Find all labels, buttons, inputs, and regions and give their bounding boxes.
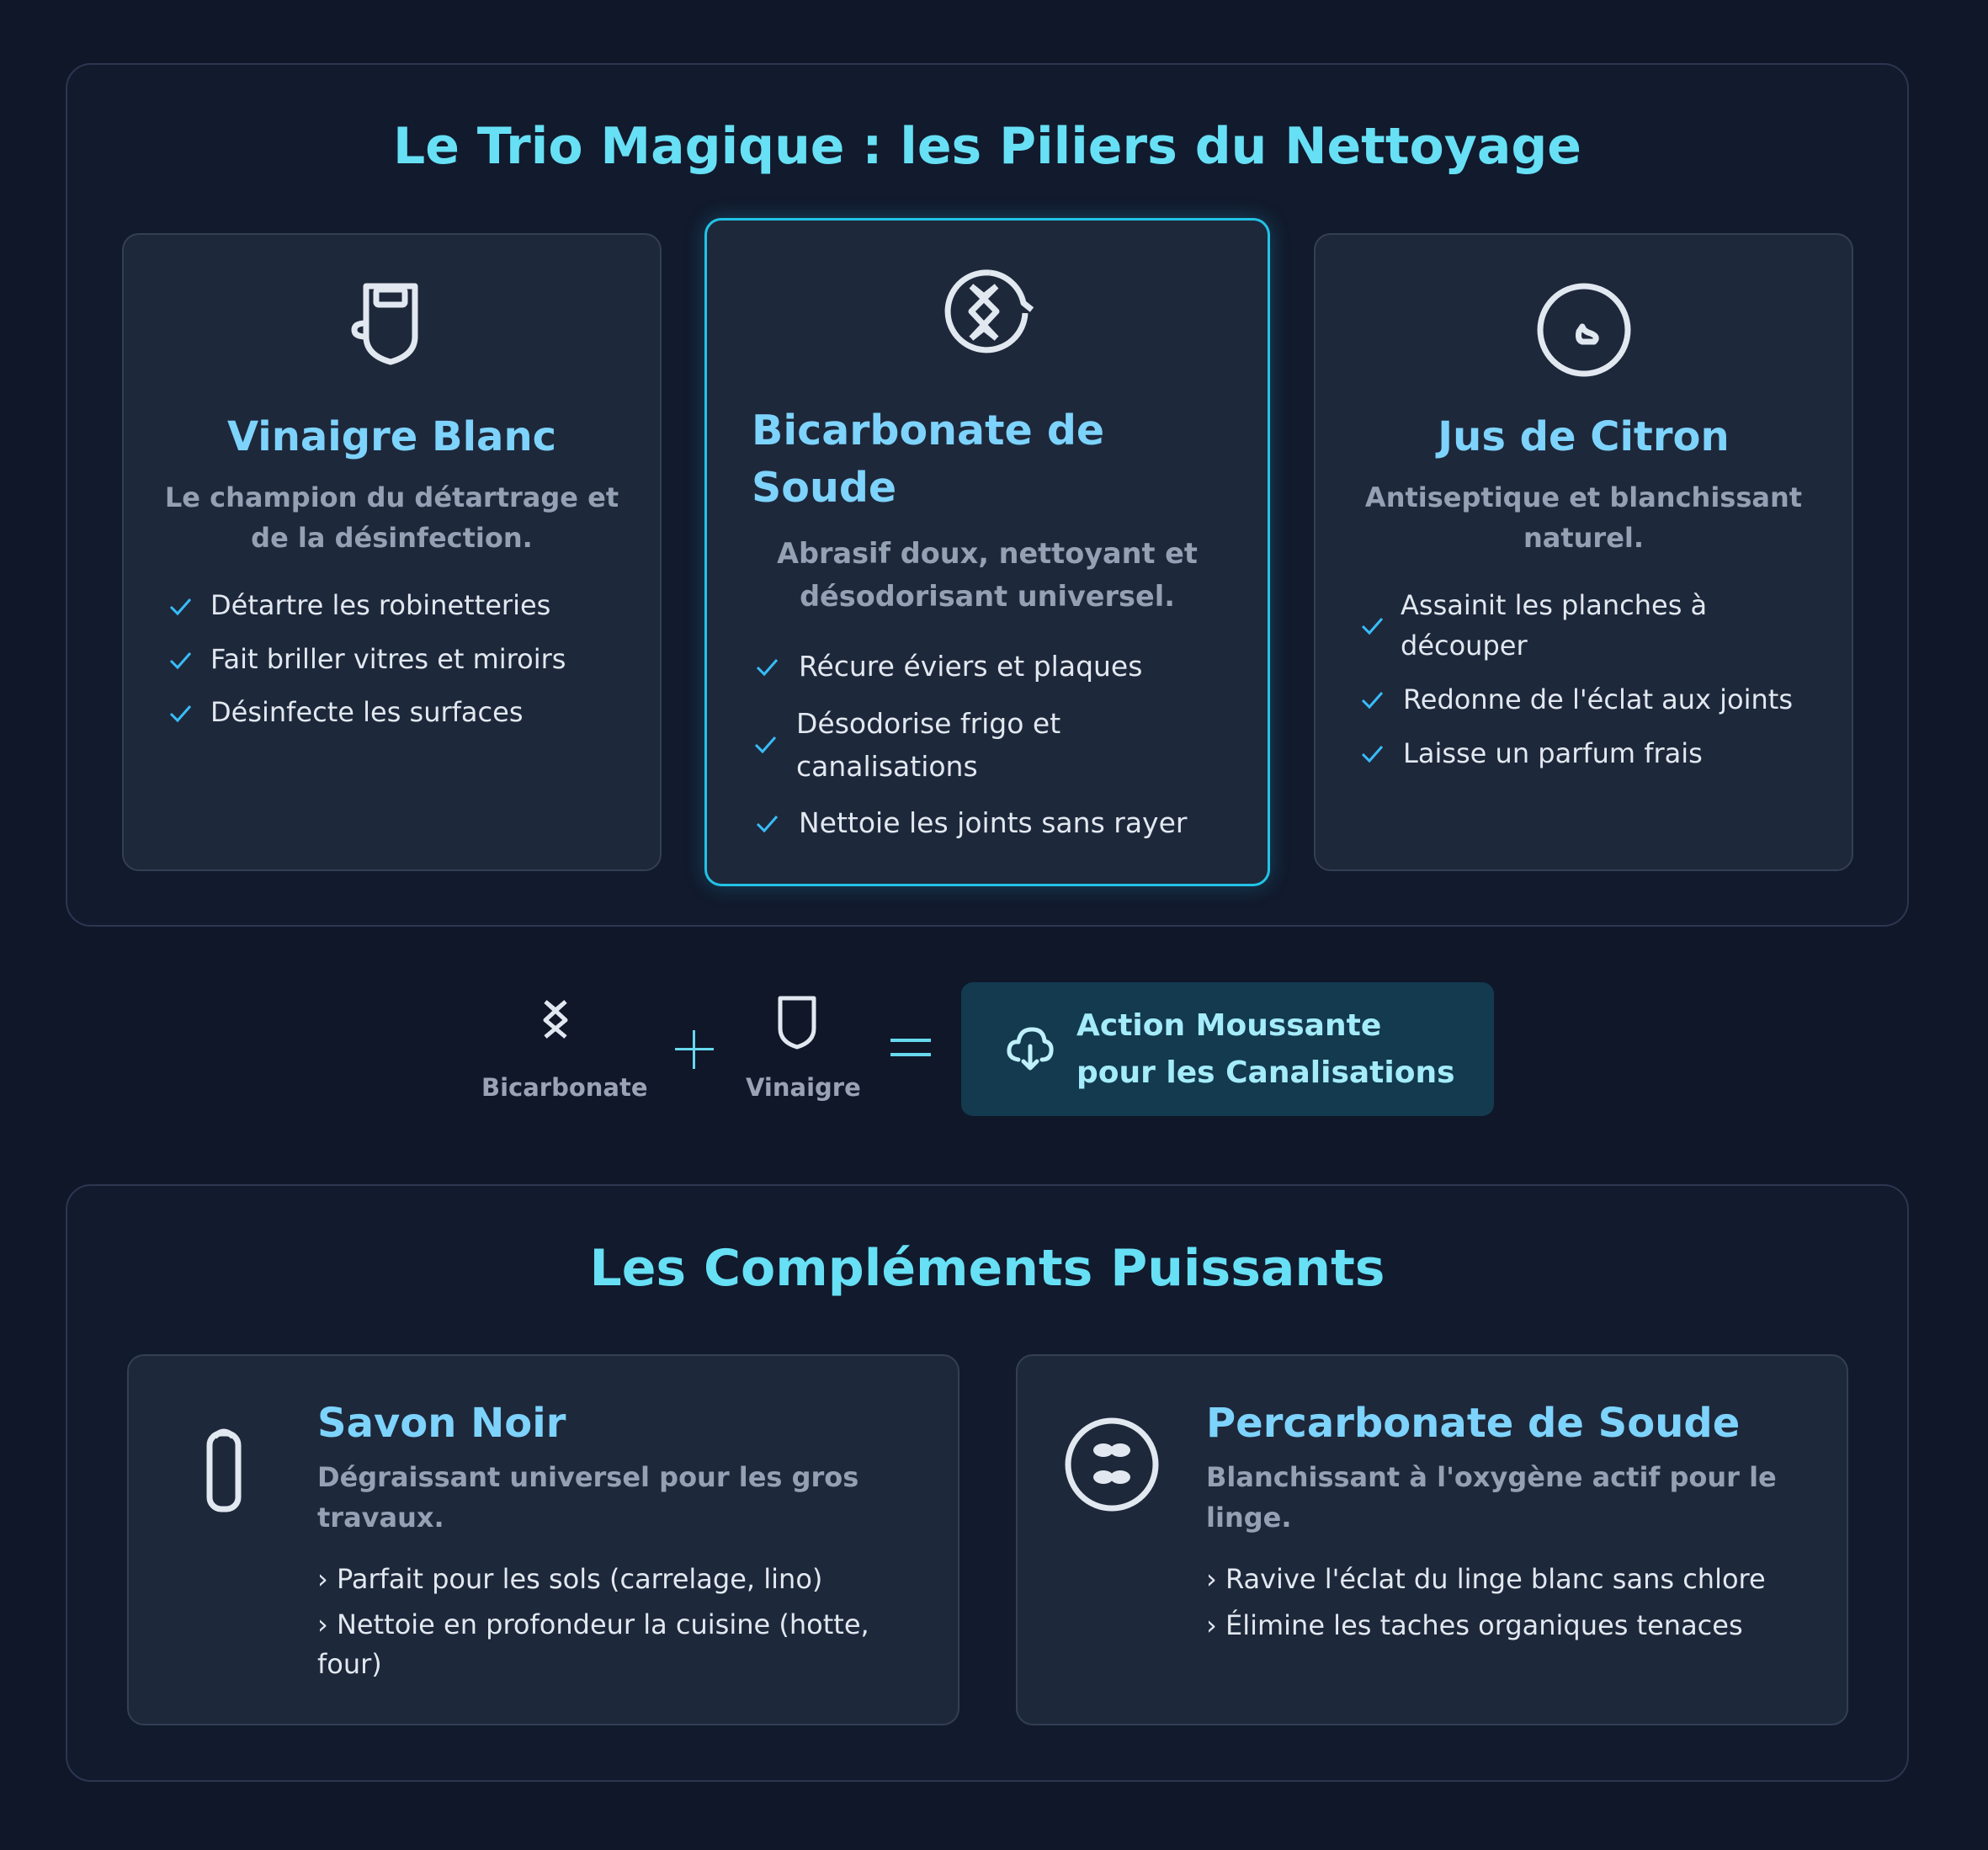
formula row [481, 982, 1494, 1116]
heading: Soude [752, 464, 896, 512]
card: savon noir [127, 1354, 959, 1725]
card: bicarbonate (highlighted): Récure éviers et plaques [799, 650, 1142, 683]
heading [752, 407, 1104, 512]
heading: Percarbonate de Soude [1206, 1400, 1740, 1447]
icon: cloud [1007, 1027, 1054, 1071]
subtitle: Antiseptique et blanchissant [1365, 481, 1802, 513]
callout text [1076, 1008, 1455, 1090]
subtitle [777, 537, 1198, 613]
card: jus de citron [1314, 233, 1853, 871]
subtitle: de la désinfection. [251, 522, 533, 554]
callout text: pour les Canalisations [1076, 1055, 1455, 1090]
icon: soap [207, 1429, 241, 1512]
card: vinaigre blanc: Détartre les robinetteries [210, 589, 550, 621]
card: jus de citron: découper [1401, 630, 1528, 662]
heading: Vinaigre Blanc [227, 413, 556, 460]
plus [675, 1030, 714, 1069]
label: bicarbonate: Bicarbonate [481, 1073, 648, 1102]
icon: bicarbonate [944, 269, 1034, 354]
subtitle: travaux. [317, 1502, 444, 1534]
icon: vinegar small [778, 997, 816, 1049]
card: bicarbonate (highlighted) [704, 218, 1270, 886]
heading: Bicarbonate de [752, 407, 1104, 455]
title: Le Trio Magique : les Piliers du Nettoyage [393, 117, 1581, 176]
label: vinaigre: Vinaigre [746, 1073, 861, 1102]
icon: percarbonate [1066, 1417, 1158, 1512]
card: savon noir: › Nettoie en profondeur la cuisine (hotte, [317, 1608, 869, 1640]
panel: trio magique [66, 63, 1909, 927]
panel: compléments [66, 1184, 1909, 1782]
card: bicarbonate (highlighted): canalisations [796, 750, 978, 783]
card: jus de citron: Assainit les planches à [1401, 589, 1707, 621]
list [1362, 589, 1793, 769]
subtitle: Le champion du détartrage et [165, 481, 619, 513]
subtitle [317, 1461, 858, 1534]
subtitle: naturel. [1523, 522, 1644, 554]
card: bicarbonate (highlighted): Désodorise frigo et [796, 707, 1060, 740]
subtitle [1206, 1461, 1777, 1534]
card: savon noir: four) [317, 1648, 382, 1680]
heading: Savon Noir [317, 1400, 566, 1447]
equals [890, 1039, 931, 1056]
card: vinaigre blanc: Fait briller vitres et miroirs [210, 643, 566, 675]
card: jus de citron: Redonne de l'éclat aux joints [1403, 683, 1793, 715]
subtitle: Blanchissant à l'oxygène actif pour le [1206, 1461, 1777, 1493]
callout: action moussante [961, 982, 1494, 1116]
subtitle: Dégraissant universel pour les gros [317, 1461, 858, 1493]
card: percarbonate [1016, 1354, 1848, 1725]
list [170, 589, 566, 728]
heading: Jus de Citron [1438, 413, 1730, 460]
card: vinaigre blanc [122, 233, 662, 871]
subtitle: Abrasif doux, nettoyant et [777, 537, 1198, 570]
card: percarbonate: › Élimine les taches organiques tenaces [1206, 1609, 1743, 1641]
card: bicarbonate (highlighted): Nettoie les joints sans rayer [799, 806, 1187, 839]
list: › Parfait pour les sols (carrelage, lino) [317, 1563, 822, 1595]
subtitle: désodorisant universel. [800, 580, 1175, 613]
icon: bicarbonate small [544, 1000, 567, 1039]
card: vinaigre blanc: Désinfecte les surfaces [210, 696, 523, 728]
title: Les Compléments Puissants [589, 1239, 1385, 1298]
subtitle [1365, 481, 1802, 554]
list: › Ravive l'éclat du linge blanc sans chlore [1206, 1563, 1766, 1595]
subtitle: linge. [1206, 1502, 1291, 1534]
subtitle [165, 481, 619, 554]
icon: vinegar bottle [352, 283, 417, 365]
callout text: Action Moussante [1076, 1008, 1381, 1043]
list [755, 650, 1187, 839]
icon: lemon [1537, 283, 1631, 377]
card: jus de citron: Laisse un parfum frais [1403, 737, 1703, 769]
